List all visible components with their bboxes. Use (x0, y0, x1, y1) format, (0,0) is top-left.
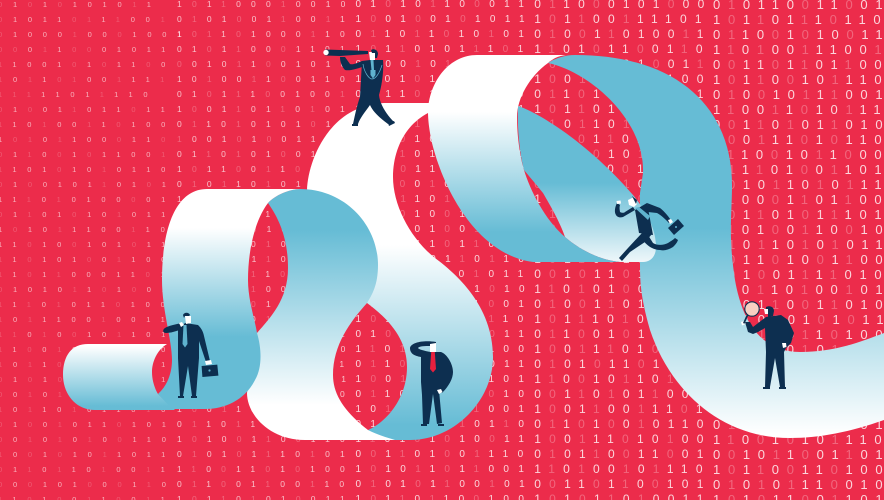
ribbon: long right sweep running off the edge (548, 55, 884, 438)
figure: businessman scratching head (410, 341, 453, 426)
figure: businessman with magnifying glass (741, 302, 794, 389)
figure: businessman with briefcase, hand to chin (163, 313, 218, 398)
binary digit background: 010101100011 100100101011 011011010101 101101011101 010010110110 110101101010 001101011100 101010100111 010110011010 110010101001 001101011010 101011010110 011001011011 100110110100 011010010101 110101001110 001011011001 101010110110 011011001011 100110101010 011001101001 101001110110 010110101011 110100110100 011010101011 100101101101 011010011010 101011011001 010100110110 110101010011 001101001110 101011011001 010101100101 101101100100 (356, 0, 534, 500)
ribbon: blue-to-white descending fold (247, 189, 395, 440)
ribbon: inner lens fold (518, 106, 656, 262)
binary digit background: 01010101011 010110111001 0100010001001 000110001011 110010101100 101101001111 11111011110 010011011011 110100110100 101011000110 011001011001 110101010110 010010110101 111010100001 011010101011 101011100110 110100101011 110101001100 110110001101 010101101001 111010110100 101110010011 110100101101 110010110100 101101001011 010100110011 001011001100 101101011010 010010110101 001010100110 100101011011 011011010011 000101000110 110100110011 (0, 0, 192, 500)
binary digit background: 101100010010 010100110011 101101000110 010110001101 001011001010 101001100110 010111001001 100110110101 011010101011 100101001101 011010100110 101100110100 010110101011 110011011001 011001101010 101010101011 011010101101 100101101010 011001101101 101011001010 010110101101 110010110010 001101010011 101011010100 011010011011 101010101001 010110110010 100110101110 011011010010 101001100110 010101110101 110011010100 011001100110 101101010011 (177, 0, 356, 500)
ribbon: upper white fold (428, 55, 620, 262)
ribbon: large white fold (300, 103, 493, 440)
ribbon: left white-to-blue fold (158, 189, 300, 409)
binary digit background: 011000101000 101100111101 010011010011 110101100110 001101010011 100111010100 011010101101 101101001110 010110110010 110011010101 001101011000 111010011011 010101101100 110100101101 010111001010 100011010110 011101001100 101100101001 001011011010 110101001011 010011011000 101110101101 011001010011 100111010100 010101101001 110010110110 001101011001 100110011101 011010010110 100111010100 010110011001 110100101110 001101100101 101011010011 (534, 0, 713, 500)
figure: businessman with telescope (323, 49, 395, 126)
figure: businessman running with briefcase (615, 196, 684, 261)
ribbon: left curled end (63, 344, 175, 410)
